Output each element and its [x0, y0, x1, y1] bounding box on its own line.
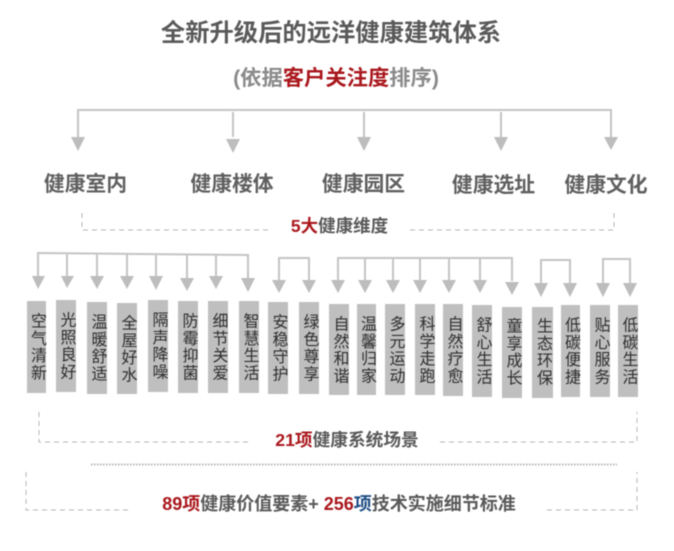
scene: 绿色尊享: 绿色尊享	[300, 313, 320, 383]
scene: 细节关爱: 细节关爱	[210, 312, 228, 382]
scene: 隔声降噪	[148, 300, 168, 392]
scene: 全屋好水: 全屋好水	[118, 314, 138, 384]
scene: 安稳守护: 安稳守护	[270, 313, 288, 383]
caption: 89项 + 256项 standards: 89项健康价值要素+ 256项技术实施细节标准	[162, 493, 516, 514]
scene: 贴心服务	[590, 305, 610, 397]
arrows: group 1	[32, 253, 255, 292]
scene: 科学走跑	[415, 304, 436, 395]
dotted divider	[91, 464, 617, 466]
scene: 细节关爱	[208, 301, 228, 393]
arrows: group 2	[272, 258, 316, 293]
arrows: group 3	[331, 258, 519, 295]
scene: 低碳便捷	[561, 305, 581, 397]
scene: 温馨归家: 温馨归家	[358, 315, 377, 385]
scene: 自然疗愈	[443, 304, 464, 396]
scene: 科学走跑: 科学走跑	[416, 315, 436, 385]
bracket: standards	[26, 472, 637, 510]
title: 全新升级后的远洋健康建筑体系	[161, 20, 501, 47]
scene: 温馨归家	[357, 304, 377, 395]
scene: 温暖舒适: 温暖舒适	[88, 313, 108, 383]
bracket: 21 scenes	[39, 412, 637, 442]
caption: 21项健康系统场景: 21项健康系统场景	[275, 429, 419, 450]
scene: 智慧生活	[239, 301, 260, 393]
scene: 低碳生活	[618, 305, 638, 397]
arrows: five dimensions	[71, 110, 618, 153]
scene: 低碳便捷: 低碳便捷	[562, 316, 581, 386]
arrows: group 4	[534, 260, 577, 297]
scene: 自然和谐: 自然和谐	[330, 315, 350, 385]
scene: 光照良好	[56, 300, 76, 392]
scene: 生态环保	[532, 307, 553, 398]
scene: 多元运动	[385, 304, 406, 395]
label: 健康室内: 健康室内	[44, 172, 127, 196]
bracket: 5 dimensions	[82, 213, 614, 230]
scene: 贴心服务: 贴心服务	[592, 316, 610, 386]
scene: 生态环保: 生态环保	[534, 317, 553, 387]
scene: 舒心生活	[472, 305, 492, 397]
scene: 多元运动: 多元运动	[386, 315, 406, 385]
subtitle: (依据客户关注度排序)	[233, 65, 439, 90]
scene: 防霉抑菌	[178, 301, 198, 393]
label: 健康楼体: 健康楼体	[190, 172, 274, 196]
scene: 智慧生活: 智慧生活	[240, 312, 260, 382]
scene: 光照良好: 光照良好	[58, 311, 76, 381]
label: 健康文化: 健康文化	[564, 173, 648, 197]
scene: 舒心生活: 舒心生活	[474, 316, 492, 386]
caption: 5大健康维度: 5大健康维度	[291, 216, 388, 236]
scene: 安稳守护	[268, 302, 288, 394]
scene: 童享成长: 童享成长	[504, 316, 522, 387]
scene: 空气清新	[27, 301, 47, 393]
scene: 自然和谐	[329, 304, 350, 395]
label: 健康园区: 健康园区	[322, 172, 405, 196]
scene: 绿色尊享	[299, 302, 320, 394]
scene: 温暖舒适	[87, 302, 108, 394]
scene: 隔声降噪: 隔声降噪	[150, 311, 168, 381]
label: 健康选址: 健康选址	[452, 173, 535, 197]
scene: 全屋好水	[117, 303, 138, 394]
scene: 自然疗愈: 自然疗愈	[444, 315, 464, 385]
arrows: group 5	[596, 259, 637, 297]
scene: 防霉抑菌: 防霉抑菌	[180, 312, 198, 382]
scene: 空气清新: 空气清新	[28, 312, 47, 382]
scene: 低碳生活: 低碳生活	[620, 316, 638, 386]
scene: 童享成长	[502, 307, 522, 398]
